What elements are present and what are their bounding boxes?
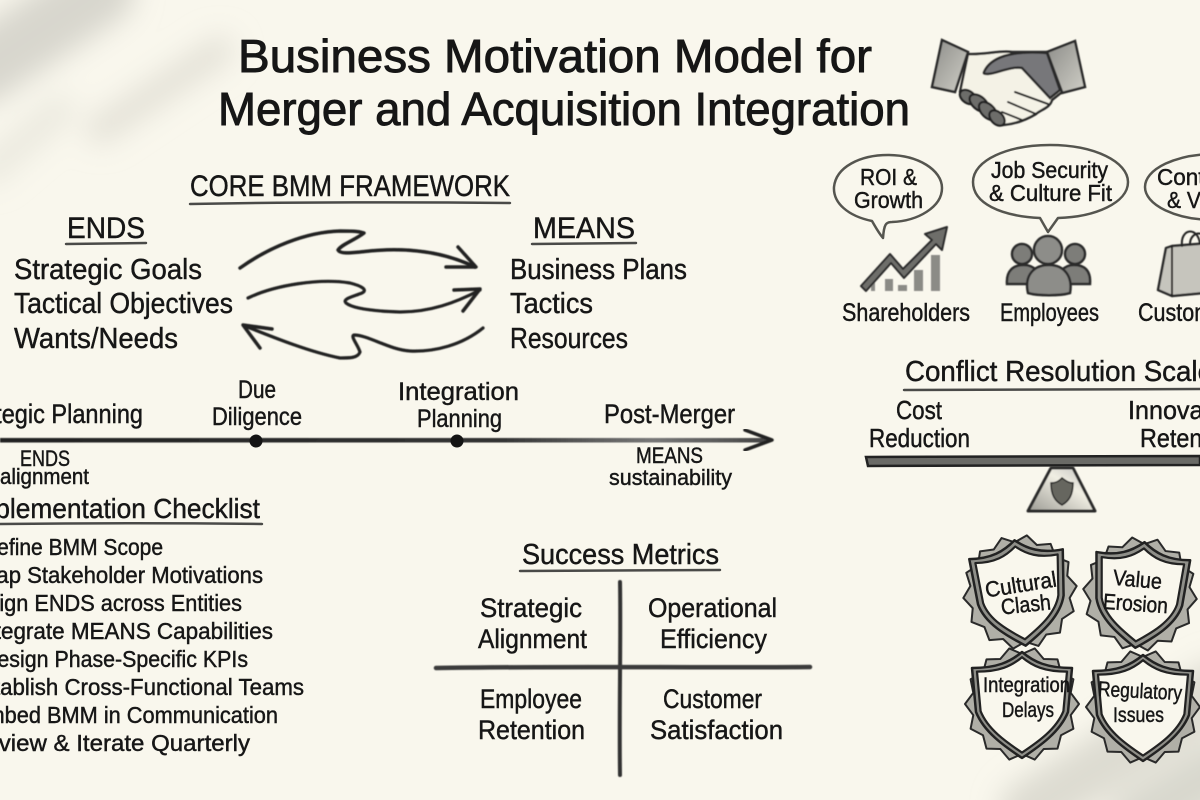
milestone: integration planning: Planning <box>417 405 502 433</box>
milestone: integration planning: Integration <box>398 378 519 406</box>
metric: strategic alignment <box>478 593 587 654</box>
risk badge: regulatory issues: Regulatory <box>1097 678 1183 705</box>
speech bubble: job security and culture fit: & Culture Fit <box>989 180 1113 206</box>
means heading: MEANS <box>533 212 635 245</box>
risk badge: regulatory issues <box>1086 651 1200 763</box>
milestone: due diligence <box>212 376 302 448</box>
metrics heading: Success Metrics <box>522 539 719 571</box>
means list: Resources <box>510 323 628 355</box>
metric: employee retention <box>478 684 585 745</box>
metric: customer satisfaction: Customer <box>663 684 762 714</box>
metric: strategic alignment: Strategic <box>480 593 582 623</box>
means list: Tactics <box>510 288 593 320</box>
metric: operational efficiency <box>648 593 777 654</box>
milestone: strategic planning <box>0 399 143 489</box>
arrows: ends and means exchange <box>240 231 483 358</box>
milestone: due diligence: Diligence <box>212 403 302 431</box>
panel: ends <box>14 212 233 355</box>
risk badge: cultural clash: Cultural <box>983 567 1058 602</box>
scale label: cost reduction: Cost <box>896 395 943 425</box>
speech bubble: ROI and growth: Growth <box>854 187 923 213</box>
ends list <box>14 254 233 355</box>
metric: employee retention: Employee <box>480 684 582 714</box>
scale beam <box>866 456 1200 466</box>
icon: shopping bag <box>1158 231 1200 296</box>
checklist items <box>0 534 304 756</box>
title: Merger and Acquisition Integration <box>218 83 910 135</box>
panel: conflict resolution scale <box>866 356 1200 511</box>
scale label: cost reduction: Reduction <box>869 423 970 453</box>
means list <box>510 254 687 355</box>
scale label: cost reduction <box>869 395 970 453</box>
risk badge: cultural clash <box>958 531 1082 653</box>
ends heading: ENDS <box>67 212 145 245</box>
risk badge: regulatory issues: Issues <box>1113 704 1164 727</box>
risk badge: integration delays: Integration <box>983 674 1070 697</box>
risk badge: cultural clash: Clash <box>1000 589 1052 620</box>
metric: strategic alignment: Alignment <box>478 624 587 654</box>
scale label: innovation retention <box>1128 395 1200 453</box>
title: Business Motivation Model for <box>238 30 872 82</box>
stakeholder: employees <box>973 145 1128 327</box>
milestone: strategic planning: alignment <box>0 464 89 489</box>
milestone: strategic planning: ENDS <box>20 446 70 471</box>
metric: employee retention: Retention <box>478 715 585 745</box>
risk badge: value erosion <box>1078 534 1200 654</box>
timeline <box>0 376 772 490</box>
milestone: post-merger: MEANS <box>636 443 703 468</box>
scale fulcrum with shield <box>1028 468 1095 511</box>
milestone: post-merger: Post-Merger <box>604 399 735 429</box>
icon: rising chart <box>861 227 947 291</box>
risk badge: value erosion: Value <box>1112 565 1163 594</box>
speech bubble: ROI and growth: ROI & <box>860 164 917 190</box>
metric: operational efficiency: Efficiency <box>660 624 767 654</box>
title <box>218 30 910 135</box>
metrics quadrant cross <box>436 582 810 775</box>
risk badge: value erosion: Erosion <box>1102 589 1169 618</box>
timeline arrow <box>0 430 772 450</box>
speech bubble: ROI and growth <box>834 155 942 238</box>
heading: core BMM framework: CORE BMM FRAMEWORK <box>190 170 510 203</box>
metric: customer satisfaction: Satisfaction <box>650 715 783 745</box>
ends list: Tactical Objectives <box>14 288 233 320</box>
speech bubble: continuity and value <box>1145 154 1200 220</box>
panel: success metrics <box>436 539 810 775</box>
icon: handshake <box>932 40 1085 129</box>
means list: Business Plans <box>510 254 687 286</box>
milestone: due diligence: Due <box>238 376 276 404</box>
stakeholder: customers <box>1138 154 1200 327</box>
speech bubble: job security and culture fit: Job Security <box>991 157 1108 183</box>
panel: implementation checklist <box>0 493 304 756</box>
risk badge: integration delays <box>965 648 1079 760</box>
panel: means <box>510 212 687 355</box>
metric: customer satisfaction <box>650 684 783 745</box>
label: shareholders: Shareholders <box>842 299 970 327</box>
ends list: Strategic Goals <box>14 254 202 286</box>
stakeholder: shareholders <box>834 155 970 327</box>
speech bubble: job security and culture fit <box>973 145 1128 232</box>
risk badge: integration delays: Delays <box>1002 699 1054 722</box>
icon: people group <box>1007 236 1090 295</box>
label: employees: Employees <box>1000 299 1099 327</box>
milestone: integration planning <box>398 378 519 448</box>
milestone: post-merger: sustainability <box>609 465 732 490</box>
metric: operational efficiency: Operational <box>648 593 777 623</box>
milestone: post-merger <box>604 399 735 490</box>
ends list: Wants/Needs <box>14 323 178 355</box>
